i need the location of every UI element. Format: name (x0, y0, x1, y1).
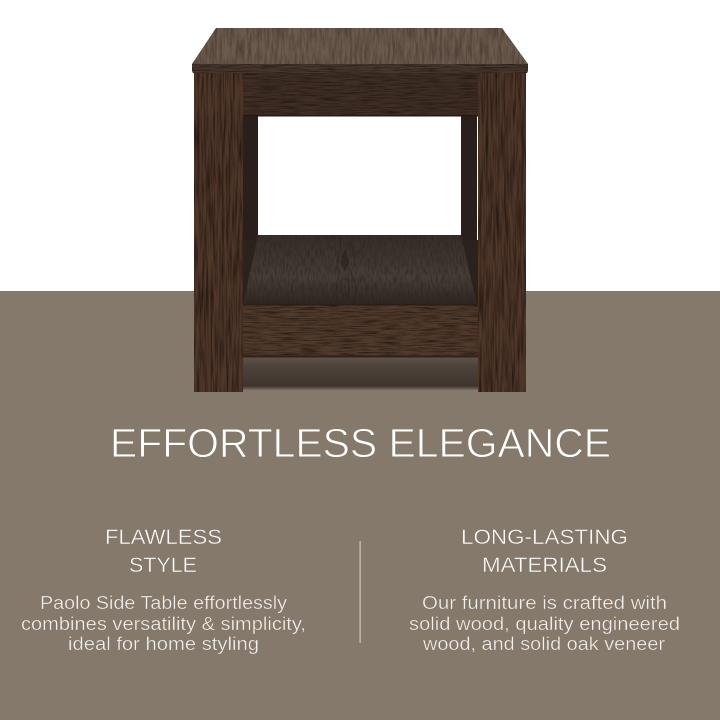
right column: long-lasting materials (409, 525, 680, 654)
back legs (243, 116, 477, 246)
floor shadow under rail (243, 357, 478, 390)
heading: flawless style: STYLE (129, 553, 197, 577)
table top front edge (192, 64, 528, 73)
right front leg (478, 73, 526, 392)
body text: long-lasting materials: Our furniture is crafted with (422, 593, 667, 613)
table top surface (192, 28, 528, 64)
body text: long-lasting materials: wood, and solid oak veneer (422, 634, 665, 654)
tan background panel (0, 291, 720, 720)
body text: flawless style (21, 593, 306, 654)
body text: flawless style: ideal for home styling (68, 634, 259, 654)
lower front rail (243, 304, 478, 358)
body text: long-lasting materials (409, 593, 680, 654)
body text: flawless style: combines versatility & simplicity, (21, 614, 306, 634)
heading: long-lasting materials: MATERIALS (482, 553, 607, 577)
lower shelf surface (243, 235, 478, 305)
left front leg (194, 73, 243, 392)
heading: flawless style: FLAWLESS (105, 525, 222, 549)
left column: flawless style (21, 525, 306, 654)
body text: long-lasting materials: solid wood, quality engineered (409, 614, 680, 634)
upper apron (241, 73, 479, 116)
column divider (360, 541, 361, 643)
shelf wood knot (336, 236, 356, 305)
side table product (192, 28, 528, 392)
heading: long-lasting materials: LONG-LASTING (461, 525, 628, 549)
body text: flawless style: Paolo Side Table effortlessly (40, 593, 287, 613)
title: EFFORTLESS ELEGANCE (110, 420, 611, 466)
heading: flawless style (105, 525, 222, 577)
heading: long-lasting materials (461, 525, 628, 577)
